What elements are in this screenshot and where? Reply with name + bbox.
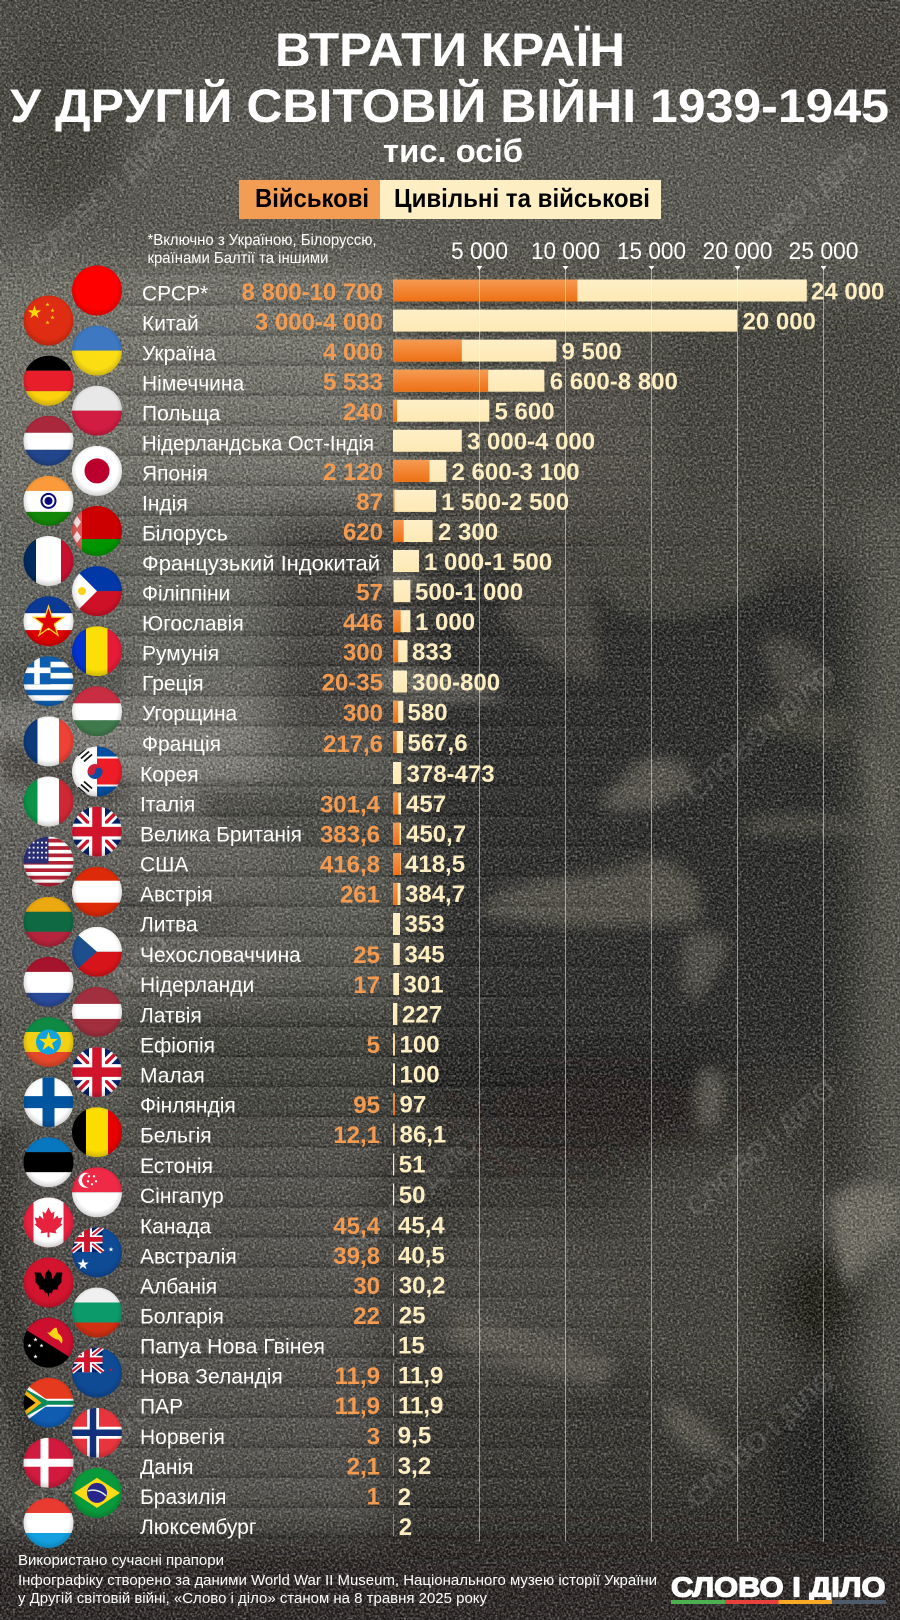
bar: Ефіопія <box>393 1034 395 1056</box>
total losses values: 2 300 <box>438 519 498 546</box>
legend: Цивільні та військові <box>394 183 650 213</box>
row: Норвегія: Норвегія <box>140 1426 225 1449</box>
total losses values: 450,7 <box>406 821 466 848</box>
icon: flag New Zealand <box>71 1347 122 1398</box>
row: Франція: 217,6 <box>323 731 383 758</box>
total losses values: 2 <box>399 1514 412 1541</box>
icon: flag Japan <box>72 446 122 496</box>
watermarks: СЛОВО І ДІЛО <box>680 1073 842 1223</box>
bar: Італія <box>393 792 401 814</box>
row: Австрія: 261 <box>340 882 380 908</box>
row: США: 416,8 <box>320 852 380 878</box>
row: Албанія: 30 <box>353 1273 380 1300</box>
icon: flag UK <box>72 807 122 857</box>
row: Данія <box>140 1454 380 1480</box>
watermarks: СЛОВО І ДІЛО <box>13 928 175 1078</box>
row: Австралія: Австралія <box>140 1246 237 1268</box>
row: Румунія: 300 <box>343 640 383 666</box>
row: Ефіопія <box>140 1032 380 1059</box>
row: Велика Британія <box>140 822 380 848</box>
row: Австралія <box>140 1243 380 1270</box>
row: Югославія <box>142 610 383 636</box>
total losses values: 1 500-2 500 <box>441 489 569 516</box>
row: Чехословаччина <box>140 942 380 969</box>
axis labels: 10 000 <box>531 238 600 265</box>
total losses values: 500-1 000 <box>415 579 523 606</box>
icon: flag Netherlands <box>24 957 74 1007</box>
icon: flag Bulgaria <box>72 1288 122 1338</box>
bar: Велика Британія <box>393 823 401 845</box>
bar: ПАР <box>393 1394 394 1416</box>
row: Польща: 240 <box>343 399 383 426</box>
icon: flag Philippines <box>72 566 122 616</box>
row: Україна: 4 000 <box>323 339 383 366</box>
row: Чехословаччина: 25 <box>353 942 380 969</box>
total losses values: 9 500 <box>562 338 622 366</box>
row: Бразилія: Бразилія <box>140 1486 227 1509</box>
row: Болгарія: 22 <box>353 1303 380 1330</box>
row: Польща <box>142 399 383 426</box>
bar: Китай <box>393 310 737 332</box>
logo: СЛОВО І ДІЛО <box>671 1572 886 1602</box>
row: Нова Зеландія: 11,9 <box>335 1363 380 1390</box>
bar: Нідерландська Ост-Індія <box>393 430 462 452</box>
row: Албанія <box>140 1273 380 1300</box>
row: Бельгія: 12,1 <box>333 1122 380 1149</box>
icon: flag Ukraine <box>72 326 122 376</box>
total losses values: 1 000 <box>415 609 475 636</box>
icon: flag Papua New Guinea <box>18 1313 78 1368</box>
row: Нова Зеландія: Нова Зеландія <box>140 1366 283 1388</box>
icon: flag Greece <box>24 656 74 706</box>
total losses values: 45,4 <box>398 1212 445 1239</box>
total losses values: 378-473 <box>406 761 495 788</box>
watermarks: СЛОВО І ДІЛО <box>3 1388 165 1538</box>
bar: Корея <box>393 762 401 784</box>
row: Румунія: Румунія <box>142 642 219 666</box>
bar: США <box>393 853 401 875</box>
total losses values <box>398 278 884 1541</box>
row: Данія: 2,1 <box>347 1454 380 1480</box>
row: Корея: Корея <box>140 764 199 786</box>
bar: СРСР <box>393 280 807 302</box>
watermarks: СЛОВО І ДІЛО <box>680 1364 842 1514</box>
total losses values: 6 600-8 800 <box>550 368 678 396</box>
row: Німеччина: 5 533 <box>323 369 383 396</box>
row: Канада: 45,4 <box>333 1213 381 1240</box>
title <box>10 23 889 132</box>
total losses values: 30,2 <box>399 1272 446 1299</box>
icon: flag Canada <box>24 1197 74 1247</box>
row: США <box>140 852 380 878</box>
icon: flag Korea <box>72 746 122 796</box>
row: Папуа Нова Гвінея: Папуа Нова Гвінея <box>140 1336 325 1358</box>
row: Греція: 20-35 <box>322 670 383 696</box>
bar: Канада <box>393 1214 394 1236</box>
total losses values: 301 <box>404 972 444 998</box>
footer notes <box>18 1552 657 1607</box>
icon: flag Australia <box>71 1227 122 1277</box>
row: Греція: Греція <box>142 672 204 696</box>
icon: flag Ethiopia <box>24 1017 74 1067</box>
row: Болгарія <box>140 1303 380 1330</box>
row: Югославія: Югославія <box>142 612 244 636</box>
row: Філіппіни <box>142 580 383 606</box>
row: Болгарія: Болгарія <box>140 1306 224 1328</box>
axis labels: 25 000 <box>788 238 858 265</box>
total losses values: 97 <box>400 1092 426 1119</box>
row: Нідерланди <box>140 972 380 999</box>
title: ВТРАТИ КРАЇН <box>275 23 625 76</box>
row: Австралія: 39,8 <box>333 1243 380 1270</box>
bar: Албанія <box>393 1274 394 1296</box>
bar: Австралія <box>393 1244 394 1266</box>
row: ПАР: 11,9 <box>335 1393 380 1420</box>
row: Індія <box>142 489 383 516</box>
bar: Німеччина <box>393 370 544 392</box>
row: Нідерланди: 17 <box>353 972 380 999</box>
icon: flag Belgium <box>72 1107 122 1157</box>
row: Білорусь <box>142 519 383 546</box>
row: Японія: 2 120 <box>323 459 383 486</box>
row: СРСР <box>142 279 383 306</box>
footer notes: у Другій світовій війні, «Слово і діло» станом на 8 травня 2025 року <box>18 1590 487 1607</box>
row: ПАР <box>140 1393 380 1420</box>
total losses values: 1 000-1 500 <box>424 549 552 576</box>
row: Фінляндія: 95 <box>353 1092 380 1119</box>
total losses values: 100 <box>400 1032 440 1058</box>
total losses values: 9,5 <box>398 1422 431 1450</box>
row: США: США <box>140 854 188 876</box>
row bands <box>85 276 670 1538</box>
total losses values: 20 000 <box>742 308 816 336</box>
row: Естонія: Естонія <box>140 1155 213 1178</box>
bar: Греція <box>393 670 407 692</box>
bar: Малая <box>393 1063 395 1085</box>
icon: flag Poland <box>72 386 122 436</box>
bar: Сінгапур <box>393 1184 394 1206</box>
row: СРСР: 8 800-10 700 <box>242 279 383 306</box>
icon: flag Netherlands East Indies <box>24 416 74 466</box>
row: Латвія: Латвія <box>140 1004 202 1028</box>
row: Японія: Японія <box>142 462 208 486</box>
bar: Французький Індокитай <box>393 550 419 572</box>
row: Нідерландська Ост-Індія: Нідерландська Ост-Індія <box>142 432 374 456</box>
total losses values: 418,5 <box>405 851 465 878</box>
row: Білорусь: 620 <box>343 519 383 546</box>
bar: Норвегія <box>393 1424 394 1446</box>
row: Люксембург: Люксембург <box>140 1516 257 1539</box>
icon: flag French Indochina <box>24 536 74 586</box>
icon: flag France <box>24 716 74 766</box>
row: Білорусь: Білорусь <box>142 522 228 546</box>
row: Італія: 301,4 <box>320 792 381 818</box>
total losses values: 300-800 <box>412 670 500 696</box>
axis grid lines <box>476 266 826 1542</box>
row: Велика Британія: Велика Британія <box>140 824 302 846</box>
title: У ДРУГІЙ СВІТОВІЙ ВІЙНІ 1939-1945 <box>10 79 889 132</box>
row: Малая: Малая <box>140 1064 205 1088</box>
bar: Індія <box>393 490 436 512</box>
row: Греція <box>142 670 383 696</box>
bar: Франція <box>393 731 403 753</box>
bar: Австрія <box>393 883 400 905</box>
icon: flag Czechoslovakia <box>72 927 122 977</box>
total losses values: 24 000 <box>811 278 884 306</box>
bar: Люксембург <box>393 1514 394 1536</box>
row: Індія: Індія <box>142 492 188 516</box>
bar: Нідерланди <box>393 973 399 995</box>
bar: Філіппіни <box>393 580 410 602</box>
footnote <box>148 232 376 267</box>
row: Фінляндія <box>140 1092 380 1119</box>
icon: flag Romania <box>72 626 122 676</box>
icon: flag India <box>24 476 74 526</box>
row: Югославія: 446 <box>343 610 383 636</box>
row: Китай: 3 000-4 000 <box>255 309 383 336</box>
bar: Бразилія <box>393 1484 394 1506</box>
total losses values: 3,2 <box>398 1453 431 1480</box>
row: Україна: Україна <box>142 342 216 366</box>
row: Україна <box>142 339 383 366</box>
watermarks: СЛОВО І ДІЛО <box>723 134 876 280</box>
row: Данія: Данія <box>140 1456 194 1479</box>
row: Канада <box>140 1213 381 1240</box>
watermarks: СЛОВО І ДІЛО <box>323 1128 485 1278</box>
icon: flag Germany <box>24 356 74 406</box>
bar: Польща <box>393 400 489 422</box>
bar: Югославія <box>393 610 410 632</box>
row: Бразилія <box>140 1484 380 1510</box>
icon: flag USA <box>24 837 74 887</box>
bar: Болгарія <box>393 1304 394 1326</box>
watermarks: СЛОВО І ДІЛО <box>24 119 185 271</box>
total losses values: 2 <box>398 1484 411 1511</box>
row: Австрія: Австрія <box>140 884 213 906</box>
bar: Угорщина <box>393 701 403 723</box>
icon: flag China <box>24 296 74 346</box>
icon: flag Lithuania <box>24 897 74 947</box>
row: Китай: Китай <box>142 312 199 336</box>
bar: Білорусь <box>393 520 433 542</box>
row: Сінгапур: Сінгапур <box>140 1185 224 1208</box>
bar: Румунія <box>393 640 408 662</box>
icon: flag Austria <box>72 867 122 917</box>
icon: flag South Africa <box>24 1378 74 1428</box>
bar: Папуа Нова Гвінея <box>393 1334 394 1356</box>
icon: flag Norway <box>72 1408 122 1458</box>
footer notes: Інфографіку створено за даними World War II Museum, Національного музею історії України <box>18 1572 657 1589</box>
row: Чехословаччина: Чехословаччина <box>140 944 301 967</box>
total losses values: 345 <box>404 942 445 968</box>
icon: flag Latvia <box>72 987 122 1037</box>
icon: flag Estonia <box>24 1137 74 1187</box>
watermarks: СЛОВО І ДІЛО <box>680 658 842 808</box>
icon: flag Yugoslavia <box>24 596 74 646</box>
total losses values: 580 <box>408 700 448 726</box>
row: Нідерланди: Нідерланди <box>140 974 254 997</box>
row: Угорщина: Угорщина <box>142 702 238 726</box>
icon: flag Hungary <box>72 686 122 736</box>
total losses values: 11,9 <box>398 1362 443 1389</box>
icon: flag Brazil <box>72 1468 122 1518</box>
bar: Фінляндія <box>393 1093 395 1115</box>
row: СРСР: СРСР* <box>142 282 208 306</box>
row: ПАР: ПАР <box>140 1396 183 1418</box>
row: Японія <box>142 459 383 486</box>
legend: Військові <box>255 183 369 213</box>
bar: Литва <box>393 913 400 935</box>
total losses values: 5 600 <box>494 398 555 426</box>
icon: flag Albania <box>24 1258 74 1308</box>
row: Китай <box>142 309 383 336</box>
row: Литва: Литва <box>140 914 198 936</box>
total losses values: 51 <box>399 1152 426 1179</box>
icon: flag Belarus <box>72 506 122 556</box>
total losses values: 100 <box>400 1062 440 1089</box>
row: Філіппіни: Філіппіни <box>142 582 230 606</box>
row: Ефіопія: Ефіопія <box>140 1034 215 1058</box>
total losses values: 833 <box>412 639 452 666</box>
row: Румунія <box>142 640 383 666</box>
footnote: країнами Балтії та іншими <box>148 250 328 267</box>
icon: flag Finland <box>24 1077 74 1127</box>
total losses values: 40,5 <box>398 1242 445 1269</box>
axis labels: 5 000 <box>451 238 508 265</box>
footer notes: Використано сучасні прапори <box>18 1552 224 1569</box>
bar: Чехословаччина <box>393 943 400 965</box>
axis labels: 20 000 <box>702 238 772 265</box>
row: Норвегія <box>140 1424 380 1450</box>
row: Польща: Польща <box>142 402 221 426</box>
row: Албанія: Албанія <box>140 1276 217 1298</box>
bar: Бельгія <box>393 1123 395 1145</box>
row: Фінляндія: Фінляндія <box>140 1094 236 1118</box>
row: Німеччина <box>142 369 383 396</box>
row: Угорщина <box>142 700 383 727</box>
total losses values: 2 600-3 100 <box>452 459 580 486</box>
country names and military losses <box>140 279 383 1539</box>
row: Велика Британія: 383,6 <box>320 822 380 848</box>
total losses values: 457 <box>406 791 446 818</box>
flags <box>18 266 122 1548</box>
row: Французький Індокитай: Французький Індокитай <box>142 552 380 576</box>
row: Нова Зеландія <box>140 1363 380 1390</box>
bar: Данія <box>393 1454 394 1476</box>
subtitle: тис. осіб <box>383 133 523 169</box>
row: Франція <box>142 731 383 758</box>
legend <box>239 180 661 219</box>
total losses values: 86,1 <box>400 1122 446 1149</box>
row: Бразилія: 1 <box>367 1484 380 1510</box>
icon: flag Malaya <box>72 1047 122 1097</box>
total losses values: 3 000-4 000 <box>467 428 595 456</box>
axis labels <box>451 238 858 265</box>
icon: flag Luxembourg <box>24 1498 74 1548</box>
total losses values: 25 <box>399 1302 426 1329</box>
icon: flag Italy <box>24 776 74 826</box>
axis labels: 15 000 <box>617 238 686 265</box>
row: Бельгія: Бельгія <box>140 1124 212 1148</box>
bar: Нова Зеландія <box>393 1364 394 1386</box>
total losses values: 353 <box>404 911 445 938</box>
bar: Україна <box>393 340 556 362</box>
row: Ефіопія: 5 <box>367 1032 380 1059</box>
row: Австрія <box>140 882 380 908</box>
total losses values: 567,6 <box>408 730 468 757</box>
row: Італія: Італія <box>140 794 195 816</box>
total losses values: 50 <box>399 1182 426 1209</box>
icon: flag Singapore <box>72 1167 122 1217</box>
row: Індія: 87 <box>356 489 383 516</box>
bar: Японія <box>393 460 446 482</box>
icon: flag USSR <box>72 266 122 316</box>
row: Канада: Канада <box>140 1216 211 1238</box>
bar: Латвія <box>393 1003 397 1025</box>
total losses values: 11,9 <box>398 1392 443 1420</box>
row: Бельгія <box>140 1122 380 1149</box>
bar: Естонія <box>393 1154 394 1176</box>
row: Німеччина: Німеччина <box>142 372 244 396</box>
row: Франція: Франція <box>142 733 221 756</box>
total losses values: 384,7 <box>405 881 465 908</box>
row: Угорщина: 300 <box>343 700 383 727</box>
icon: flag Denmark <box>24 1438 74 1488</box>
total losses values: 15 <box>398 1332 425 1359</box>
row: Норвегія: 3 <box>367 1424 380 1450</box>
total losses values: 227 <box>402 1002 442 1028</box>
footnote: *Включно з Україною, Білоруссю, <box>148 232 376 249</box>
row: Філіппіни: 57 <box>356 580 383 606</box>
bar chart <box>393 280 807 1536</box>
row: Італія <box>140 792 381 818</box>
